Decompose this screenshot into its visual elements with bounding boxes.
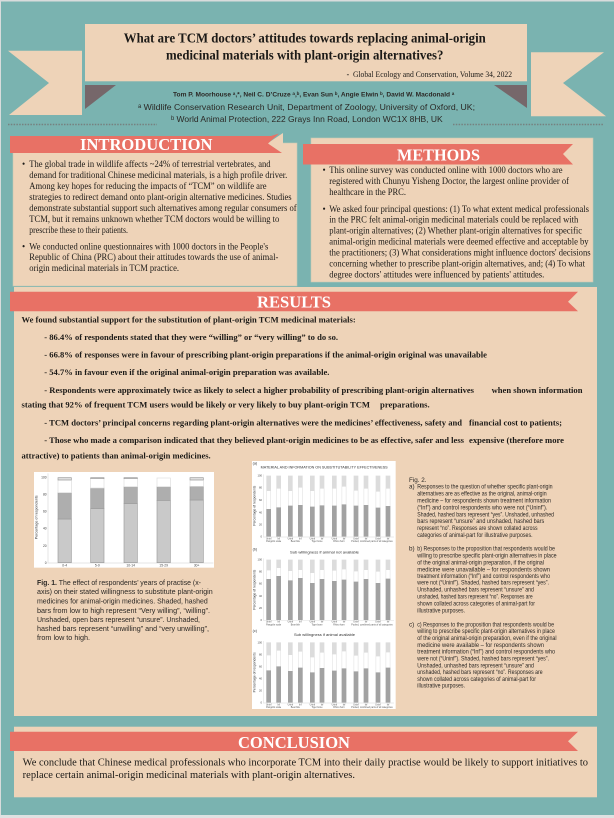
chart a: substitutability effectiveness: Inf	[277, 538, 280, 540]
left title ribbon tail	[8, 51, 82, 115]
chart b: willingness if animal not available: Uninf	[375, 622, 381, 624]
chart a: substitutability effectiveness: 40	[259, 510, 263, 514]
chart a: substitutability effectiveness: Uninf	[332, 538, 337, 540]
results text: preparations.	[380, 400, 430, 410]
chart a: substitutability effectiveness: Uninf	[288, 538, 293, 540]
figure 2 caption: c) Responses to the proposition that respondents would be	[417, 621, 554, 628]
chart a: substitutability effectiveness: Bear bile	[291, 540, 301, 543]
chart b: willingness if animal not available: (b)	[253, 547, 257, 551]
figure 1 caption: axis) on their stated willingness to substitute plant-origin	[37, 587, 213, 596]
figure 2 caption: of the original animal-origin preparation, even if the original	[417, 635, 557, 642]
figure 1: stacked bar chart of willingness by years of practise: 40	[43, 527, 47, 531]
figure 1: stacked bar chart of willingness by years of practise: 30+	[194, 564, 200, 568]
chart b: willingness if animal not available: Pooled, combined parts of all categories	[351, 623, 394, 626]
methods text: healthcare in the PRC.	[329, 187, 406, 197]
figure 1 caption: Fig. 1. The effect of respondents’ years of practise (x-	[37, 578, 201, 587]
figure 2 caption: (“Inf”) and control respondents who were not (“Uninf”).	[417, 505, 548, 512]
chart c: willingness if animal available: Uninf	[375, 704, 381, 706]
figure 2 caption: illustrative purposes.	[417, 607, 465, 614]
introduction text: demonstrate substantial support such alternatives among regular consumers of	[29, 203, 297, 213]
right ribbon fold	[494, 85, 527, 108]
figure 1: stacked bar chart of willingness by years of practise: 15-29	[159, 564, 168, 568]
chart a: substitutability effectiveness: (a)	[253, 462, 257, 466]
methods text: This online survey was conducted online with 1000 doctors who are	[329, 165, 563, 175]
results text: expensive (therefore more	[469, 435, 564, 445]
chart b: willingness if animal not available: Sub willingness if animal not available	[290, 550, 359, 554]
chart a: substitutability effectiveness: 80	[259, 486, 263, 490]
chart a: substitutability effectiveness: 60	[259, 498, 263, 502]
figure 2 caption: medicine – for respondents shown treatment information	[417, 497, 551, 504]
methods text: registered with Chunyu Yisheng Doctor, the largest online provider of	[329, 176, 569, 186]
introduction text: We conducted online questionnaires with 1000 doctors in the People's	[29, 242, 269, 252]
chart a: substitutability effectiveness: Inf	[387, 538, 390, 540]
results text: - Those who made a comparison indicated that they believed plant-origin medicines to be as effective, safer and less	[44, 435, 465, 445]
introduction text: prescribe these to their patients.	[29, 225, 128, 235]
results text: when shown information	[492, 385, 583, 395]
figure 1: stacked bar chart of willingness by years of practise: Percentage of respondents	[34, 495, 38, 539]
figure 2 caption: Unshaded, unhashed bars represent “unsure” and	[417, 587, 534, 594]
figure 2 caption: Fig. 2.	[409, 477, 427, 484]
figure 2 caption: were not (“Uninf”). Shaded, hashed bars represent “yes”.	[416, 579, 549, 586]
figure 2 caption: of the original animal-origin preparation, if the original	[417, 559, 544, 566]
chart a: substitutability effectiveness: Inf	[343, 538, 346, 540]
conclusion text	[23, 758, 588, 781]
figure 2 caption: alternatives are as effective as the original, animal-origin	[417, 491, 547, 498]
methods text: in the PRC felt animal-origin medicinal materials could be replaced with	[329, 214, 579, 224]
chart a: substitutability effectiveness: Uninf	[353, 538, 359, 540]
chart c: willingness if animal available: Uninf	[310, 704, 315, 706]
methods text: plant-origin alternatives; (2) Whether plant-origin alternatives for specific	[329, 226, 582, 236]
chart a: substitutability effectiveness	[253, 462, 394, 543]
panel: results	[10, 287, 597, 716]
chart c: willingness if animal available: Inf	[365, 704, 368, 706]
chart b: willingness if animal not available: Uninf	[310, 622, 315, 624]
figure 2 caption: Unshaded, unhashed bars represent “unsure” and	[417, 663, 534, 670]
chart a: substitutability effectiveness: Uninf	[375, 538, 381, 540]
panel: conclusion	[10, 727, 597, 797]
methods text: We asked four principal questions: (1) To what extent medical professionals	[329, 204, 589, 214]
figure 2 caption: b) Responses to the proposition that respondents would be	[417, 546, 555, 553]
chart c: willingness if animal available: Uninf	[332, 704, 337, 706]
chart b: willingness if animal not available: Rhino horn	[333, 623, 345, 626]
introduction text	[22, 159, 297, 273]
figure 2 caption	[409, 477, 557, 690]
chart c: willingness if animal available: Inf	[321, 704, 324, 706]
figure 2 caption: bars represent “unsure” and unshaded, hashed bars	[417, 518, 544, 525]
chart b: willingness if animal not available: Percentage of respondents	[253, 569, 257, 610]
chart c: willingness if animal available: 40	[259, 677, 263, 681]
chart b: willingness if animal not available: Inf	[343, 622, 346, 624]
chart b: willingness if animal not available: Uninf	[332, 622, 337, 624]
figure 2 caption: categories of animal-part for illustrative purposes.	[417, 532, 533, 539]
chart c: willingness if animal available	[253, 629, 394, 709]
methods text: the practitioners; (3) What considerations might influence doctors' decisions	[329, 248, 591, 258]
figure 1: stacked bar chart of willingness by years of practise	[34, 472, 214, 568]
figure 1: stacked bar chart of willingness by years of practise: 0-4	[62, 564, 67, 568]
figure 2 caption: illustrative purposes.	[417, 683, 465, 690]
chart c: willingness if animal available: 60	[259, 664, 263, 668]
chart a: substitutability effectiveness: 100	[258, 474, 263, 478]
results text: - 66.8% of responses were in favour of prescribing plant-origin preparations if the animal-origin original was unavailable	[44, 350, 487, 360]
chart b: willingness if animal not available: Uninf	[288, 622, 293, 624]
chart c: willingness if animal available: (c)	[253, 629, 257, 633]
introduction text: •	[22, 159, 25, 169]
chart b: willingness if animal not available: 40	[259, 594, 263, 598]
figure 1: stacked bar chart of willingness by years of practise: 100	[41, 476, 47, 480]
figure 2 caption: medicine were available – for respondents shown	[417, 642, 544, 649]
methods text: •	[322, 165, 326, 175]
chart c: willingness if animal available: 80	[259, 652, 263, 656]
authors and affiliations	[138, 92, 475, 124]
methods text: degree doctors' attitudes were influenced by patients' attitudes.	[329, 270, 544, 280]
methods text: •	[322, 204, 326, 214]
methods text: animal-origin medicinal materials were deemed effective and acceptable by	[329, 236, 589, 246]
left ribbon fold	[85, 85, 116, 109]
conclusion heading ribbon	[10, 732, 578, 752]
results text: - 54.7% in favour even if the original animal-origin preparation was available.	[44, 367, 329, 377]
results heading ribbon	[10, 292, 578, 311]
chart c: willingness if animal available: Tiger bone	[311, 706, 323, 709]
introduction text: Republic of China (PRC) about their attitudes towards the use of animal-	[29, 252, 278, 262]
chart b: willingness if animal not available: Uninf	[353, 622, 359, 624]
chart a: substitutability effectiveness: 0	[261, 535, 263, 539]
chart b: willingness if animal not available: 0	[261, 618, 263, 622]
introduction text: strategies to redirect demand onto plant-origin alternative medicines. Studies	[29, 192, 292, 202]
chart c: willingness if animal available: Uninf	[353, 704, 359, 706]
chart b: willingness if animal not available: Inf	[387, 622, 390, 624]
title: What are TCM doctors’ attitudes towards replacing animal-origin	[124, 31, 486, 46]
chart a: substitutability effectiveness: Rhino horn	[333, 540, 345, 543]
introduction heading ribbon	[10, 133, 283, 154]
results text	[22, 315, 583, 460]
figure 2 caption: medicine were unavailable – for respondents shown	[417, 566, 550, 573]
chart b: willingness if animal not available: 20	[259, 606, 263, 610]
chart b: willingness if animal not available: Bear bile	[291, 623, 301, 626]
chart a: substitutability effectiveness: Inf	[365, 538, 368, 540]
figure 1: stacked bar chart of willingness by years of practise: 10-14	[126, 564, 135, 568]
figure 1 caption: Unshaded, open bars represent “unsure”. Unshaded,	[37, 615, 200, 624]
chart b: willingness if animal not available: 100	[258, 558, 263, 562]
figure 2 caption: unshaded, hashed bars represent “no”. Responses are	[417, 593, 533, 600]
chart a: substitutability effectiveness: Uninf	[266, 538, 272, 540]
title	[124, 31, 486, 62]
chart a: substitutability effectiveness: Inf	[299, 538, 302, 540]
conclusion heading ribbon: CONCLUSION	[238, 733, 350, 752]
introduction text: •	[22, 242, 25, 252]
methods heading ribbon	[303, 144, 573, 164]
chart b: willingness if animal not available: 80	[259, 570, 263, 574]
authors and affiliations: ᵇ World Animal Protection, 222 Grays Inn Road, London WC1X 8HB, UK	[171, 114, 443, 124]
figure 2 caption: were not (“Uninf”). Shaded, hashed bars represent “yes”.	[416, 655, 549, 662]
figure 2 caption: Shaded, hashed bars represent “yes”. Unshaded, unhashed	[417, 511, 554, 518]
results text: stating that 92% of frequent TCM users would be likely or very likely to buy plant-origin TCM	[22, 400, 370, 410]
figure 2 caption: willing to prescribe specific plant-origin alternatives in place	[416, 628, 555, 635]
introduction heading ribbon: INTRODUCTION	[80, 135, 213, 154]
authors and affiliations: ᵃ Wildlife Conservation Research Unit, Department of Zoology, University of Oxford, UK;	[138, 102, 475, 112]
figure 2 caption: c)	[409, 621, 414, 628]
results heading ribbon: RESULTS	[257, 292, 331, 311]
results text: attractive) to patients than animal-origin medicines.	[22, 450, 211, 460]
title banner	[85, 24, 527, 81]
panel: methods	[303, 138, 593, 282]
chart a: substitutability effectiveness: 20	[259, 522, 263, 526]
introduction text: TCM, but it remains unknown whether TCM doctors would be willing to	[29, 214, 280, 224]
journal citation: - Global Ecology and Conservation, Volume 34, 2022	[347, 70, 512, 79]
chart c: willingness if animal available: Sub willingness if animal available	[294, 633, 355, 637]
figure 1: stacked bar chart of willingness by years of practise: 80	[43, 493, 47, 497]
methods text	[322, 165, 591, 280]
chart c: willingness if animal available: Inf	[299, 704, 302, 706]
chart a: substitutability effectiveness: MATERIAL AND INFORMATION ON SUBSTITUTABILITY EFFECTIVENESS	[261, 466, 388, 470]
chart b: willingness if animal not available: Uninf	[266, 622, 272, 624]
figure 2 caption: shown collated across categories of animal-part for	[417, 600, 535, 607]
panel: introduction	[10, 133, 297, 286]
conclusion text: replace certain animal-origin medicinal materials with plant-origin alternatives.	[23, 770, 355, 781]
chart c: willingness if animal available: 20	[259, 689, 263, 693]
right title ribbon tail	[531, 52, 606, 116]
figure 2 caption: shown collated across categories of animal-part for	[417, 676, 536, 683]
conclusion text: We conclude that Chinese medical professionals who incorporate TCM into their daily practise would be likely to support initiatives to	[23, 758, 588, 768]
chart c: willingness if animal available: Uninf	[288, 704, 293, 706]
chart b: willingness if animal not available: Inf	[299, 622, 302, 624]
chart c: willingness if animal available: 100	[258, 640, 263, 644]
chart c: willingness if animal available: Rhino horn	[333, 706, 345, 709]
introduction text: Among key hopes for reducing the impacts of “TCM” on wildlife are	[29, 181, 267, 191]
chart b: willingness if animal not available: Inf	[277, 622, 280, 624]
chart a: substitutability effectiveness: Pooled, combined parts of all categories	[351, 540, 394, 543]
chart b: willingness if animal not available: Pangolin scale	[266, 624, 282, 626]
figure 1: stacked bar chart of willingness by years of practise: 20	[43, 544, 47, 548]
results text: - Respondents were approximately twice as likely to select a higher probability of prescribing plant-origin alternatives	[44, 385, 475, 395]
figure 2 caption: represent “no”. Responses are shown collated across	[417, 525, 538, 532]
figure 2 caption: Responses to the question of whether specific plant-origin	[417, 484, 553, 491]
figure 1 caption: bars from low to high represent “Very willing”, “willing”.	[37, 606, 210, 615]
methods text: concerning whether to prescribe plant-origin alternatives, and; (4) To what	[329, 258, 585, 268]
chart c: willingness if animal available: Uninf	[266, 704, 272, 706]
chart b: willingness if animal not available: Inf	[321, 622, 324, 624]
chart a: substitutability effectiveness: Uninf	[310, 538, 315, 540]
chart a: substitutability effectiveness: Tiger bone	[311, 540, 323, 543]
figure 1 caption: medicines for animal-origin medicines. Shaded, hashed	[37, 596, 208, 606]
chart c: willingness if animal available: Bear bile	[291, 706, 301, 709]
figure 2 caption: treatment information (“Inf”) and control respondents who	[417, 649, 555, 656]
introduction text: demand for traditional Chinese medicinal materials, is a high profile driver.	[29, 170, 287, 180]
figure 2 caption: b)	[409, 546, 415, 553]
figure 2 caption: willing to prescribe specific plant-origin alternatives in place	[416, 553, 557, 560]
chart c: willingness if animal available: Pooled, combined parts of all categories	[351, 706, 394, 709]
figure 1: stacked bar chart of willingness by years of practise: 60	[43, 510, 47, 514]
chart c: willingness if animal available: Percentage of respondents	[253, 652, 257, 692]
chart c: willingness if animal available: Inf	[277, 704, 280, 706]
figure 2: three stacked bar charts	[252, 461, 396, 709]
figure 1: stacked bar chart of willingness by years of practise: 0	[45, 561, 47, 565]
introduction text: The global trade in wildlife affects ~24% of terrestrial vertebrates, and	[29, 159, 271, 169]
figure 1: stacked bar chart of willingness by years of practise: 5-9	[95, 564, 100, 568]
chart a: substitutability effectiveness: Pangolin scale	[266, 541, 282, 543]
figure 1 caption: from low to high.	[37, 633, 90, 642]
chart b: willingness if animal not available: Inf	[365, 622, 368, 624]
results text: financial cost to patients;	[469, 418, 562, 428]
title: medicinal materials with plant-origin alternatives?	[166, 47, 443, 62]
figure 1 caption: hashed bars represent “unwilling” and “very unwilling”,	[37, 624, 209, 633]
results text: We found substantial support for the substitution of plant-origin TCM medicinal materials:	[22, 315, 356, 325]
results text: - TCM doctors’ principal concerns regarding plant-origin alternatives were the medicines’ effectiveness, safety and	[44, 418, 462, 428]
chart b: willingness if animal not available: Tiger bone	[311, 623, 323, 626]
chart a: substitutability effectiveness: Percentage of respondents	[253, 485, 257, 526]
chart c: willingness if animal available: 0	[261, 701, 263, 705]
authors and affiliations: Tom P. Moorhouse ᵃ,*, Neil C. D’Cruze ᵃ,ᵇ, Evan Sun ᵇ, Angie Elwin ᵇ, David W. Macdonald ᵃ	[173, 92, 455, 99]
chart c: willingness if animal available: Inf	[343, 704, 346, 706]
chart b: willingness if animal not available: 60	[259, 582, 263, 586]
results text: - 86.4% of respondents stated that they were “willing” or “very willing” to do so.	[44, 332, 338, 342]
figure 1 caption	[37, 578, 213, 642]
chart b: willingness if animal not available	[253, 547, 394, 626]
introduction text: origin medicinal materials in TCM practice.	[29, 263, 179, 273]
figure 2 caption: treatment information (“Inf”) and control respondents who	[417, 573, 550, 580]
chart c: willingness if animal available: Pangolin scale	[266, 707, 282, 709]
figure 2 caption: a)	[409, 484, 415, 491]
figure 2 caption: unshaded, hashed bars represent “no”. Responses are	[417, 669, 543, 676]
chart a: substitutability effectiveness: Inf	[321, 538, 324, 540]
methods heading ribbon: METHODS	[397, 146, 480, 164]
chart c: willingness if animal available: Inf	[387, 704, 390, 706]
